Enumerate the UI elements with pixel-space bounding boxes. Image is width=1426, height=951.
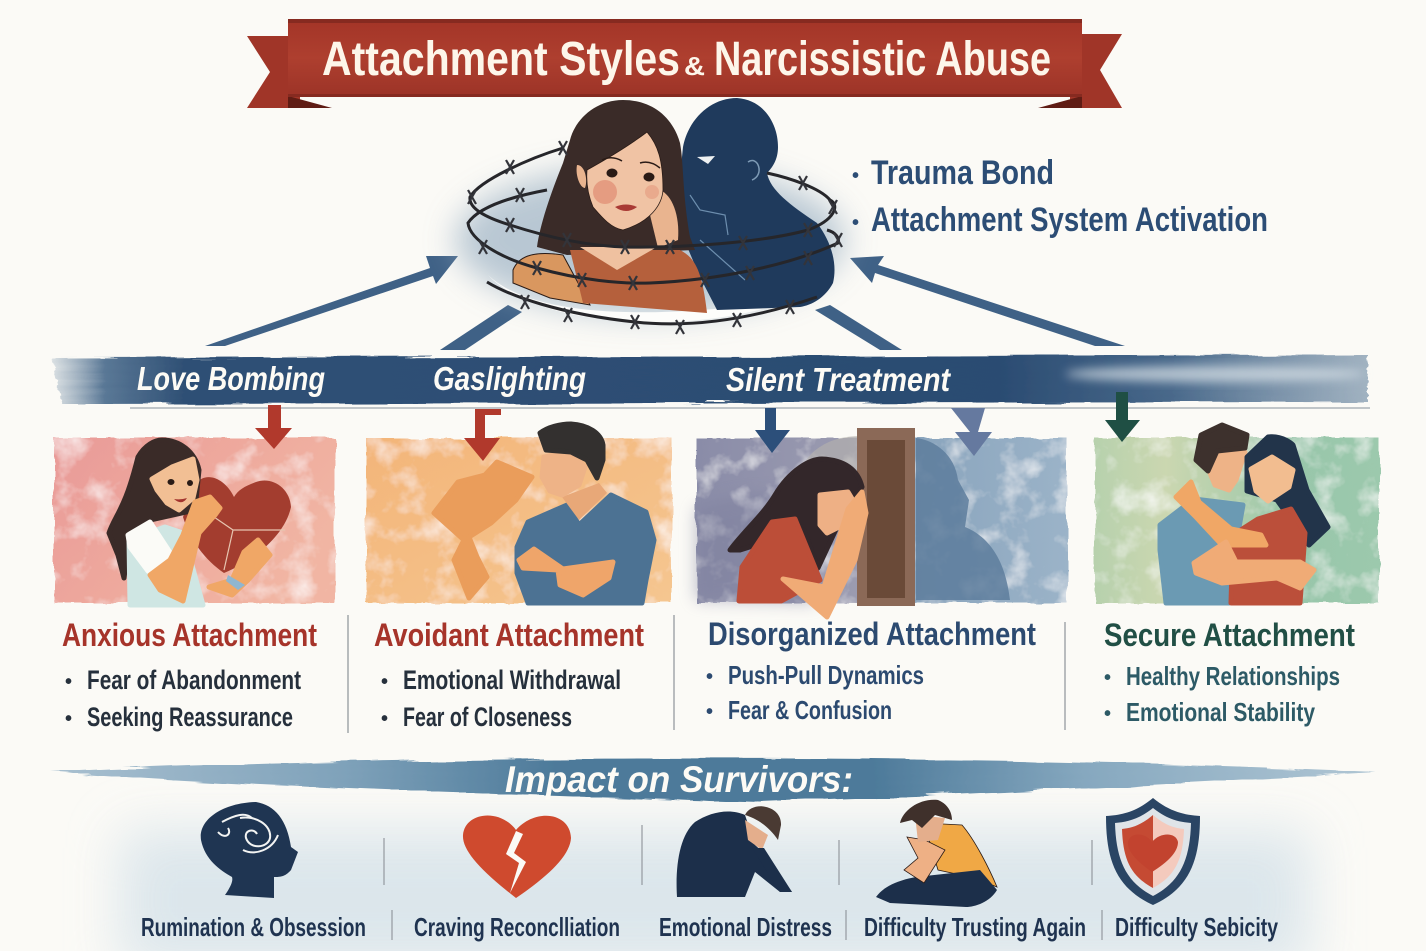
icon: head with spiral	[201, 802, 298, 898]
panel: disorganized attachment	[696, 428, 1067, 725]
heading: Secure Attachment	[1104, 617, 1355, 653]
bullet list	[1104, 661, 1340, 727]
arrows down to styles	[255, 392, 1140, 461]
callout: trauma bond list: •	[852, 212, 859, 234]
illustration: woman at door with shadow	[696, 428, 1067, 617]
impact labels: Difficulty Trusting Again	[864, 912, 1086, 942]
callout: trauma bond list	[852, 154, 1268, 239]
heading: Anxious Attachment	[62, 617, 317, 653]
heading: Avoidant Attachment	[374, 617, 644, 653]
woman shirt	[570, 250, 707, 313]
arrows to center	[205, 256, 1125, 350]
bullet list: Fear & Confusion	[728, 695, 892, 725]
woman hair	[537, 100, 695, 255]
heading: Disorganized Attachment	[708, 616, 1036, 652]
bullet list: Push-Pull Dynamics	[728, 660, 924, 690]
icon: person sitting head in hands	[876, 800, 997, 907]
bullet list: Emotional Stability	[1126, 697, 1315, 727]
illustration: embracing couple	[1095, 425, 1379, 603]
central illustration: woman and shadow figure in barbed wire	[455, 98, 845, 334]
illustration: man with crossed arms	[366, 424, 672, 603]
panel: anxious attachment	[54, 438, 335, 732]
impact labels: Emotional Distress	[659, 912, 832, 942]
bullet list: •	[706, 666, 713, 688]
tactics band	[52, 355, 1370, 409]
title banner: Attachment Styles	[322, 33, 680, 86]
bullet list: •	[381, 671, 388, 693]
impact labels: Rumination & Obsession	[141, 912, 366, 942]
callout: trauma bond list: Trauma Bond	[871, 154, 1054, 192]
impact section background wash	[120, 830, 1310, 951]
bullet list: Fear of Abandonment	[87, 665, 301, 695]
icon: kneeling figure	[677, 806, 792, 897]
bullet list: Healthy Relationships	[1126, 661, 1340, 691]
bullet list: •	[65, 708, 72, 730]
tactics band: Love Bombing	[137, 360, 325, 397]
impact labels	[141, 912, 1278, 942]
bullet list: Emotional Withdrawal	[403, 665, 621, 695]
callout: trauma bond list: Attachment System Activation	[871, 201, 1268, 239]
bullet list: Fear of Closeness	[403, 702, 572, 732]
bullet list: •	[1104, 703, 1111, 725]
woman arm	[513, 253, 590, 305]
bullet list	[381, 665, 621, 732]
icon: shield with heart	[1106, 798, 1200, 905]
impact labels: Craving Reconclliation	[414, 912, 620, 942]
bullet list: •	[65, 671, 72, 693]
bullet list: •	[706, 701, 713, 723]
icon: broken heart	[463, 815, 571, 898]
shadow figure	[680, 98, 835, 310]
tactics band: Gaslighting	[433, 360, 586, 397]
panel: avoidant attachment	[366, 424, 672, 732]
illustration: woman hugging heart	[54, 438, 335, 605]
hand by neck	[650, 190, 678, 248]
bullet list: •	[381, 708, 388, 730]
bullet list: •	[1104, 667, 1111, 689]
impact labels: Difficulty Sebicity	[1115, 912, 1278, 942]
bullet list	[706, 660, 924, 725]
bullet list: Seeking Reassurance	[87, 702, 293, 732]
impact band: Impact on Survivors:	[505, 759, 853, 800]
tactics band: Silent Treatment	[726, 361, 952, 398]
panel: secure attachment	[1095, 425, 1379, 727]
title banner	[247, 19, 1122, 108]
callout: trauma bond list: •	[852, 165, 859, 187]
impact band	[52, 758, 1376, 802]
title banner: &	[684, 51, 705, 81]
face	[587, 132, 663, 230]
bullet list	[65, 665, 301, 732]
barbed wire	[468, 141, 842, 334]
title banner: Narcissistic Abuse	[714, 33, 1051, 86]
